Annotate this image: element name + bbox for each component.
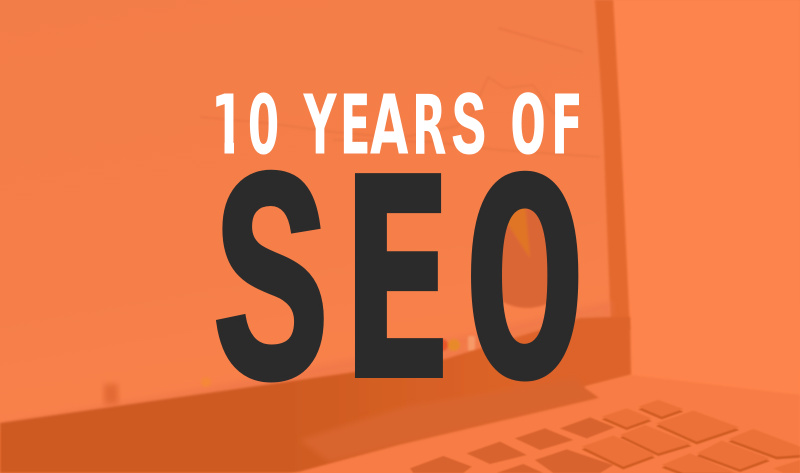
heading: SEO: S xyxy=(214,123,328,470)
heading: 10 YEARS OF: F xyxy=(551,77,583,173)
heading: SEO xyxy=(214,118,584,470)
heading: 10 YEARS OF: Y xyxy=(303,77,337,173)
laptop: keyboard keys xyxy=(410,400,800,473)
heading: 10 YEARS OF: A xyxy=(370,77,409,173)
heading: SEO: E xyxy=(339,118,455,445)
heading: 10 YEARS OF xyxy=(216,92,579,154)
heading: 10 YEARS OF: 1 xyxy=(211,77,245,173)
laptop: keyboard deck xyxy=(250,375,800,473)
heading: 10 YEARS OF: E xyxy=(340,78,371,173)
heading: 10 YEARS OF: O xyxy=(511,78,545,180)
dock: blurred application bar xyxy=(0,300,612,428)
background: wall behind laptop xyxy=(613,0,800,473)
laptop: lower bezel band xyxy=(0,317,631,473)
heading: 10 YEARS OF: S xyxy=(452,79,486,181)
chart: faint line graph on screen xyxy=(200,28,600,157)
heading: SEO: O xyxy=(465,123,584,469)
heading: 10 YEARS OF: 0 xyxy=(248,78,279,173)
laptop: hinge xyxy=(300,378,600,462)
chart: pie on screen xyxy=(477,202,577,308)
heading: 10 YEARS OF: R xyxy=(412,78,446,173)
screen bezel: right edge xyxy=(595,0,630,330)
